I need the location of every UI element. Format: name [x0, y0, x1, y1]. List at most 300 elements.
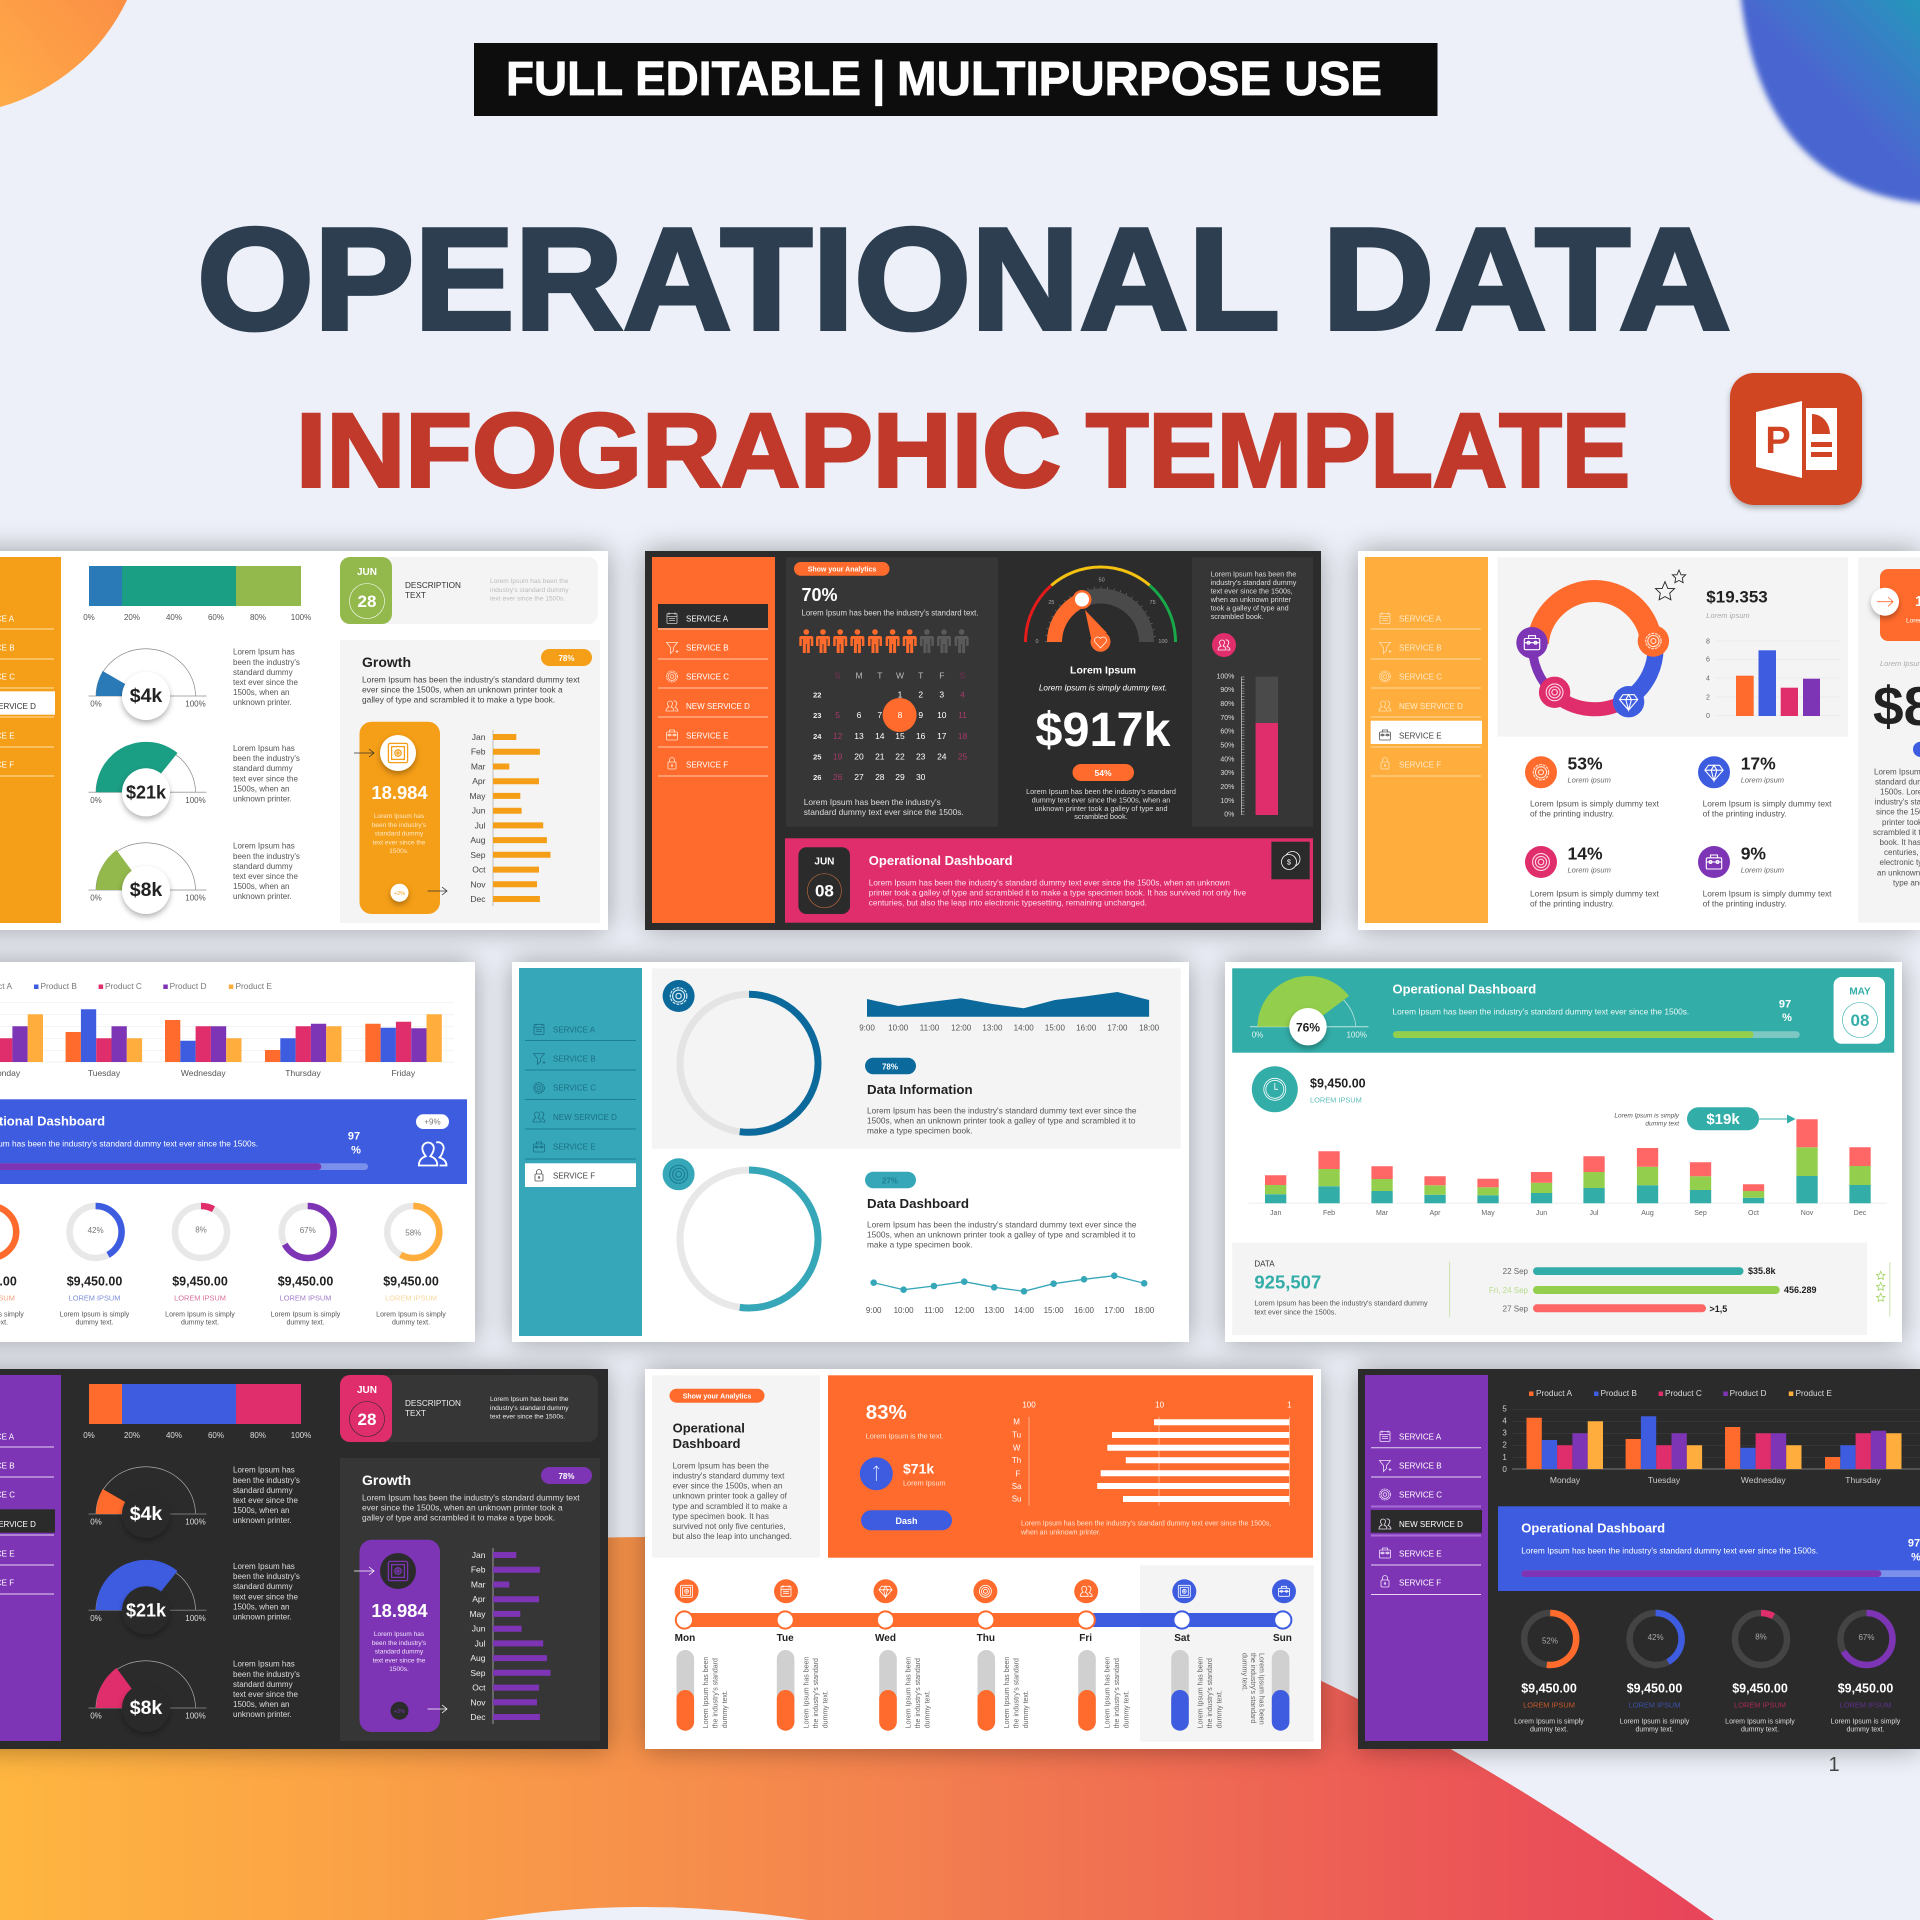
gauge: $8k: unknown printer.: [233, 892, 292, 901]
date card: DESCRIPTION: [405, 1399, 461, 1408]
kpi: $917k: scrambled book.: [1074, 812, 1128, 821]
data dashboard section: 18:00: [1134, 1306, 1155, 1315]
growth panel: been the industry's: [372, 822, 427, 829]
calendar panel: W: [896, 670, 904, 680]
calendar panel: 15: [895, 731, 905, 741]
timeline: Fri: [1079, 1633, 1092, 1644]
thermometer panel: 100%: [1216, 673, 1234, 680]
stacked bar: 60%: [208, 1431, 224, 1440]
data dashboard section: 11:00: [924, 1306, 944, 1315]
header band: Lorem Ipsum has been the industry's standard dummy text ever since the 1500s.: [1392, 1006, 1689, 1016]
operational dashboard band: JUN: [814, 857, 834, 868]
operational dashboard band: Operational Dashboard: [869, 853, 1013, 868]
calendar panel: standard dummy text ever since the 1500s.: [804, 807, 964, 817]
bar chart: Monday: [1550, 1475, 1581, 1485]
kpi: $917k: Lorem Ipsum is simply dummy text.: [1039, 683, 1167, 692]
blue band: [1498, 1506, 1920, 1591]
growth panel: Mar: [471, 1580, 486, 1590]
donut labels: Lorem Ipsum is simply: [1514, 1718, 1584, 1725]
banner: [474, 43, 1438, 116]
donut labels: [0, 1225, 446, 1327]
blue band: %: [351, 1144, 361, 1156]
gauge: $8k: 0%: [90, 1712, 102, 1721]
bar chart: 0: [1502, 1465, 1507, 1474]
intro panel: [652, 1375, 820, 1558]
gauge: $21k: unknown printer.: [233, 1612, 292, 1622]
data panel: $35.8k: [1748, 1266, 1777, 1276]
donut labels: LOREM IPSUM: [280, 1293, 331, 1302]
intro panel: type and scrambled it to make a: [673, 1502, 788, 1511]
growth panel: Jan: [472, 1550, 486, 1560]
stacked bar chart: May: [1481, 1210, 1495, 1217]
sidebar: SERVICE E: [1399, 1549, 1442, 1558]
data panel: 27 Sep: [1503, 1305, 1529, 1314]
panel: amber growth dashboard: [0, 551, 608, 930]
growth panel: text ever since the: [373, 839, 426, 846]
donut labels: Lorem Ipsum is simply: [376, 1311, 446, 1318]
panel: ring chart dashboard: [1358, 551, 1920, 930]
calendar panel: 25: [813, 752, 821, 761]
data information panel: Data Information: [867, 1082, 973, 1097]
orange chart panel: 100: [1022, 1400, 1036, 1409]
speedometer: 100: [1158, 639, 1168, 645]
sidebar: SERVICE E: [1399, 731, 1442, 740]
donut labels: Lorem Ipsum is simply: [1725, 1718, 1795, 1725]
stat: 9%: of the printing industry.: [1703, 898, 1787, 908]
data panel: DATA: [1254, 1260, 1275, 1269]
kpi: clock: LOREM IPSUM: [1310, 1095, 1362, 1104]
speedometer: 0: [1035, 639, 1039, 645]
stat: 17%: Lorem Ipsum is simply dummy text: [1703, 798, 1832, 808]
growth panel: 78%: [558, 1472, 575, 1481]
orange chart panel: F: [1016, 1469, 1021, 1478]
date card: [340, 1375, 598, 1442]
gauge: $21k: been the industry's: [233, 1572, 300, 1581]
calendar panel: 22: [895, 751, 905, 761]
operational dashboard band: 08: [815, 882, 834, 901]
thermometers: dummy text.: [1023, 1690, 1030, 1728]
thermometer panel: took a galley of type and: [1211, 604, 1289, 612]
thermometers: Lorem Ipsum has been: [1105, 1657, 1112, 1728]
sidebar: SERVICE C: [686, 673, 729, 682]
legend: Product D: [170, 981, 206, 991]
bar chart: Friday: [391, 1068, 416, 1078]
legend: Product A: [1536, 1388, 1572, 1398]
growth panel: Dec: [470, 894, 486, 904]
sidebar: SERVICE B: [686, 644, 729, 653]
stacked bar chart: Jan: [1270, 1210, 1281, 1217]
data dashboard section: 10:00: [894, 1306, 914, 1315]
orange chart panel: $71k: [903, 1460, 934, 1476]
sidebar: NEW SERVICE D: [1399, 702, 1463, 711]
gauge: $21k: 100%: [185, 796, 206, 805]
donut labels: 67%: [300, 1226, 316, 1235]
gauge: $4k: text ever since the: [233, 1496, 298, 1505]
calendar panel: 24: [813, 732, 822, 741]
donut labels: $9,450.00: [1627, 1682, 1682, 1696]
thermometers: dummy text.: [1240, 1653, 1248, 1691]
gauge: $4k: Lorem Ipsum has: [233, 648, 295, 657]
donuts: [0, 1206, 439, 1258]
gauge: $8k: $8k: [130, 1697, 162, 1719]
growth panel: 78%: [558, 654, 575, 663]
growth panel: Lorem Ipsum has been the industry's standard dummy text: [362, 1493, 580, 1503]
gauge: $8k: Lorem Ipsum has: [233, 842, 295, 851]
subtitle: TEMPLATE: [1086, 392, 1630, 510]
legend: Product C: [105, 981, 142, 991]
data information panel: 78%: [882, 1062, 898, 1072]
ring chart panel: 6: [1706, 657, 1710, 664]
sidebar: [652, 557, 775, 923]
sidebar: [0, 1375, 61, 1741]
data panel: 925,507: [1254, 1271, 1321, 1292]
data information panel: 10:00: [888, 1023, 909, 1032]
growth panel: 1500s.: [389, 848, 409, 855]
thermometer panel: 80%: [1220, 701, 1234, 708]
data information panel: 18:00: [1139, 1023, 1160, 1032]
data dashboard section: 16:00: [1074, 1306, 1095, 1315]
data dashboard section: 14:00: [1014, 1306, 1035, 1315]
stacked bar: 40%: [166, 1431, 182, 1440]
right clipped panel: book. It has: [1880, 838, 1920, 847]
blue band: Operational Dashboard: [1521, 1521, 1665, 1536]
calendar panel: M: [855, 670, 863, 680]
donut labels: Lorem Ipsum is simply: [1831, 1718, 1901, 1725]
subtitle: INFOGRAPHIC: [296, 392, 1061, 510]
blue band: Lorem Ipsum has been the industry's standard dummy text ever since the 1500s.: [1521, 1545, 1818, 1555]
gauge: $4k: [88, 648, 300, 720]
orange chart panel: when an unknown printer.: [1020, 1529, 1101, 1536]
growth panel: Jun: [472, 806, 486, 816]
donut labels: dummy text.: [1741, 1727, 1779, 1734]
growth panel: text ever since the: [373, 1657, 426, 1664]
calendar panel: 14: [875, 731, 885, 741]
data information panel: 14:00: [1014, 1023, 1034, 1032]
callout: $19k: [1614, 1107, 1796, 1130]
legend: Product B: [1600, 1388, 1637, 1398]
date card: JUN: [357, 567, 377, 578]
donut labels: dummy text.: [392, 1320, 430, 1327]
donut labels: 8%: [195, 1225, 207, 1234]
data information panel: Lorem Ipsum has been the industry's standard dummy text ever since the: [867, 1105, 1137, 1115]
stat: 53%: of the printing industry.: [1530, 808, 1614, 818]
speedometer: 75: [1150, 600, 1156, 606]
gauge: $21k: [88, 1560, 300, 1634]
thermometers: [676, 1650, 1289, 1731]
orange chart panel: Lorem Ipsum has been the industry's standard dummy text ever since the 1500s,: [1021, 1521, 1271, 1528]
data information panel: 15:00: [1045, 1023, 1065, 1032]
growth panel: Apr: [472, 776, 486, 786]
stat: 9%: 9%: [1741, 843, 1766, 863]
thermometer panel: 40%: [1220, 756, 1234, 763]
thermometer panel: when an unknown printer: [1210, 595, 1292, 604]
gauge: $4k: 0%: [90, 700, 102, 709]
header band: %: [1782, 1012, 1792, 1024]
gauge: $4k: 100%: [185, 1518, 206, 1527]
sidebar: SERVICE C: [1399, 673, 1442, 682]
date card: TEXT: [405, 1409, 426, 1418]
date card: DESCRIPTION: [405, 581, 461, 590]
gauge: $8k: 100%: [185, 894, 206, 903]
gauge: $4k: 1500s, when an: [233, 688, 290, 697]
thermometer panel: [1192, 557, 1313, 827]
date card: industry's standard dummy: [490, 587, 569, 594]
title: OPERATIONAL: [197, 198, 1280, 360]
ring chart panel: [1498, 557, 1848, 737]
gauge: $21k: standard dummy: [233, 764, 293, 773]
thermometer panel: 70%: [1220, 715, 1234, 722]
sidebar: SERVICE F: [1399, 760, 1441, 769]
gauge: $8k: standard dummy: [233, 862, 293, 871]
ring chart panel: Lorem ipsum: [1706, 611, 1750, 620]
thermometers: Lorem Ipsum has been: [803, 1657, 810, 1728]
legend: Product C: [1665, 1388, 1702, 1398]
data panel: Lorem Ipsum has been the industry's standard dummy: [1254, 1299, 1428, 1308]
thermometer panel: 10%: [1220, 798, 1234, 805]
donut labels: 67%: [1858, 1633, 1875, 1642]
gauge: $4k: [88, 1466, 300, 1538]
orange chart panel: Tu: [1012, 1431, 1021, 1440]
date card: Lorem Ipsum has been the: [490, 578, 569, 585]
data dashboard section: 9:00: [866, 1306, 882, 1315]
gauge: $4k: standard dummy: [233, 668, 293, 677]
thermometers: dummy text.: [925, 1690, 932, 1728]
stacked bar: 60%: [208, 613, 224, 622]
gauge: $8k: [88, 1660, 300, 1732]
data dashboard section: 12:00: [954, 1306, 975, 1315]
gauge: $21k: Lorem Ipsum has: [233, 744, 295, 753]
timeline: Mon: [675, 1633, 695, 1644]
calendar panel: Lorem Ipsum has been the industry's standard text.: [802, 608, 979, 617]
legend: Product E: [1796, 1388, 1832, 1398]
growth panel: Feb: [471, 747, 486, 757]
gauge: $4k: unknown printer.: [233, 698, 292, 707]
growth panel: galley of type and scrambled it to make a type book.: [362, 695, 555, 705]
kpi: $917k: [1026, 664, 1176, 821]
donut labels: $9,450.00: [278, 1275, 333, 1289]
sidebar: SERVICE B: [1399, 644, 1442, 653]
donut labels: $9,450.00: [67, 1275, 122, 1289]
banner: MULTIPURPOSE USE: [897, 53, 1382, 106]
donut labels: LOREM IPSUM: [174, 1293, 226, 1302]
speedometer: 25: [1048, 600, 1054, 606]
thermometers: Lorem Ipsum has been: [1258, 1653, 1264, 1725]
sidebar: SERVICE A: [1399, 1432, 1442, 1441]
date card: industry's standard dummy: [490, 1405, 569, 1412]
header band: Operational Dashboard: [1392, 981, 1536, 996]
sidebar: SERVICE C: [1399, 1491, 1442, 1500]
growth panel: +2%: [394, 891, 405, 897]
growth panel: +2%: [394, 1709, 405, 1715]
decoration: top-right blue circle: [1740, 0, 1920, 204]
donut labels: LOREM IPSUM: [1840, 1700, 1891, 1709]
gauge: $21k: 0%: [90, 1614, 102, 1623]
donut labels: dummy text.: [181, 1320, 219, 1327]
kpi: $917k: dummy text ever since the 1500s, when an: [1032, 795, 1170, 804]
calendar panel: 29: [895, 772, 905, 782]
thermometers: the industry's standard: [1114, 1658, 1121, 1728]
thermometer panel: industry's standard dummy: [1211, 578, 1297, 587]
sidebar: NEW SERVICE D: [553, 1113, 617, 1122]
stat: 17%: 17%: [1741, 753, 1776, 773]
stat: 14%: 14%: [1568, 843, 1603, 863]
stacked bar chart: Feb: [1323, 1210, 1335, 1217]
date card: TEXT: [405, 591, 426, 600]
growth panel: Growth: [362, 1472, 411, 1488]
gauge: $4k: $4k: [130, 1503, 162, 1525]
thermometers: the industry's standard: [712, 1658, 720, 1728]
calendar panel: 21: [875, 751, 885, 761]
calendar panel: F: [939, 670, 944, 680]
gauge: $21k: 0%: [90, 796, 102, 805]
thermometer panel: text ever since the 1500s,: [1211, 587, 1293, 596]
header band: 97: [1779, 998, 1791, 1010]
data information panel: 11:00: [920, 1023, 940, 1032]
calendar panel: T: [918, 670, 923, 680]
growth panel: Aug: [470, 1653, 486, 1663]
operational dashboard band: centuries, but also the leap into electronic typesetting, remaining unchanged.: [869, 899, 1147, 908]
stat: 53%: [1525, 753, 1660, 818]
bar chart: [1502, 1405, 1920, 1485]
bar chart: Tuesday: [88, 1068, 121, 1078]
gauge: $21k: 1500s, when an: [233, 1602, 290, 1611]
growth panel: Apr: [472, 1594, 486, 1604]
data panel: text ever since the 1500s.: [1254, 1307, 1336, 1316]
gauge: $8k: $8k: [130, 879, 162, 901]
calendar panel: 2: [918, 689, 923, 699]
data dashboard section: 17:00: [1104, 1306, 1125, 1315]
intro panel: ever since the 1500s, when an: [673, 1481, 782, 1490]
title: DATA: [1322, 198, 1731, 360]
header band: 100%: [1346, 1031, 1367, 1040]
donut labels: [1514, 1632, 1901, 1734]
gauge: $4k: text ever since the: [233, 678, 298, 687]
stat: 53%: 53%: [1568, 753, 1603, 773]
bar chart: Thursday: [1845, 1475, 1881, 1485]
panel: teal data information: [512, 962, 1189, 1342]
growth panel: Oct: [472, 865, 486, 875]
data information panel: make a type specimen book.: [867, 1125, 973, 1135]
gauge: $8k: Lorem Ipsum has: [233, 1660, 295, 1669]
calendar panel: 27: [854, 772, 864, 782]
calendar panel: 22: [813, 690, 821, 699]
data dashboard section: 1500s, when an unknown printer took a galley of type and scrambled it to: [867, 1229, 1136, 1239]
icon: PowerPoint: [1730, 373, 1862, 505]
gauge: $4k: 100%: [185, 700, 206, 709]
gauge: $8k: been the industry's: [233, 852, 300, 861]
gauge: $21k: standard dummy: [233, 1582, 293, 1591]
stacked bar chart: Aug: [1641, 1210, 1654, 1217]
growth panel: galley of type and scrambled it to make a type book.: [362, 1513, 555, 1523]
thermometers: dummy text.: [822, 1690, 829, 1728]
stacked bar chart: Oct: [1748, 1210, 1759, 1217]
gauge: $21k: text ever since the: [233, 774, 298, 783]
stacked bar chart: [1248, 1119, 1887, 1217]
thermometers: dummy text.: [1217, 1690, 1224, 1728]
timeline: Thu: [977, 1633, 995, 1644]
stat: 14%: Lorem Ipsum is simply dummy text: [1530, 888, 1660, 898]
gauge: $8k: text ever since the: [233, 872, 298, 881]
legend: Product B: [40, 981, 77, 991]
stacked bar chart: Jun: [1536, 1210, 1547, 1217]
donut labels: Lorem Ipsum is simply: [165, 1311, 235, 1318]
sidebar: [0, 557, 61, 923]
orange chart panel: 10: [1155, 1400, 1165, 1409]
growth panel: Feb: [471, 1565, 486, 1575]
intro panel: but also the leap into unchanged.: [673, 1532, 792, 1541]
calendar panel: 1: [898, 689, 903, 699]
timeline: [675, 1579, 1296, 1644]
data dashboard section: Lorem Ipsum has been the industry's standard dummy text ever since the: [867, 1219, 1137, 1229]
growth panel: 1500s.: [389, 1666, 409, 1673]
gauge: $8k: 0%: [90, 894, 102, 903]
stacked bar: 40%: [166, 613, 182, 622]
timeline: Sat: [1174, 1633, 1190, 1644]
stacked bar: 100%: [291, 613, 311, 622]
panel: teal operational dashboard: [1225, 962, 1902, 1342]
intro panel: Operational: [673, 1421, 745, 1436]
calendar panel: 30: [916, 772, 926, 782]
data panel: >1,5: [1710, 1304, 1727, 1314]
orange chart panel: M: [1013, 1417, 1020, 1426]
stacked bar: 0%: [83, 1431, 95, 1440]
orange chart panel: Sa: [1012, 1482, 1022, 1491]
stacked bar chart: Jul: [1590, 1210, 1599, 1217]
sidebar: SERVICE A: [1399, 614, 1442, 623]
stat: 17%: Lorem ipsum: [1741, 776, 1784, 785]
speedometer: 50: [1099, 578, 1105, 584]
calendar panel: 26: [813, 773, 821, 782]
data dashboard section: make a type specimen book.: [867, 1239, 973, 1249]
growth panel: Growth: [362, 654, 411, 670]
thermometers: the industry's standard: [1207, 1658, 1214, 1728]
donut labels: 58%: [405, 1229, 421, 1238]
growth panel: Jul: [475, 820, 486, 830]
donut labels: dummy text.: [1530, 1727, 1568, 1734]
header band: 76%: [1296, 1021, 1320, 1035]
growth panel: Sep: [470, 1668, 486, 1678]
thermometers: the industry's standard: [915, 1658, 922, 1728]
growth panel: 18.984: [371, 1600, 428, 1621]
stat: 9%: [1698, 843, 1832, 908]
data information panel: [652, 968, 1181, 1149]
sidebar: NEW SERVICE D: [1399, 1520, 1463, 1529]
donut labels: 52%: [1542, 1637, 1558, 1646]
gauge: $4k: been the industry's: [233, 1476, 300, 1485]
stacked bar: 0%: [83, 613, 95, 622]
calendar panel: 26: [833, 772, 843, 782]
intro panel: Lorem Ipsum has been the: [673, 1461, 769, 1470]
bar chart: Thursday: [285, 1068, 321, 1078]
date card: text ever since the 1500s.: [490, 1414, 565, 1420]
decoration: top-left orange circle: [0, 0, 127, 107]
intro panel: survived not only five centuries,: [673, 1522, 786, 1531]
sidebar: SERVICE F: [686, 760, 728, 769]
date card: [340, 557, 598, 624]
legend: [0, 981, 272, 991]
growth panel: Sep: [470, 850, 486, 860]
data information panel: 9:00: [859, 1023, 875, 1032]
growth panel: [340, 1458, 600, 1741]
calendar panel: 3: [939, 689, 944, 699]
data information panel: 1500s, when an unknown printer took a galley of type and scrambled it to: [867, 1115, 1136, 1125]
growth panel: Jul: [475, 1638, 486, 1648]
donut labels: LOREM IPSUM: [385, 1293, 437, 1302]
sidebar: SERVICE F: [1399, 1578, 1441, 1587]
stacked bar chart: Sep: [1694, 1210, 1707, 1217]
blue band: [0, 1099, 467, 1184]
bar chart: Wednesday: [181, 1068, 226, 1078]
